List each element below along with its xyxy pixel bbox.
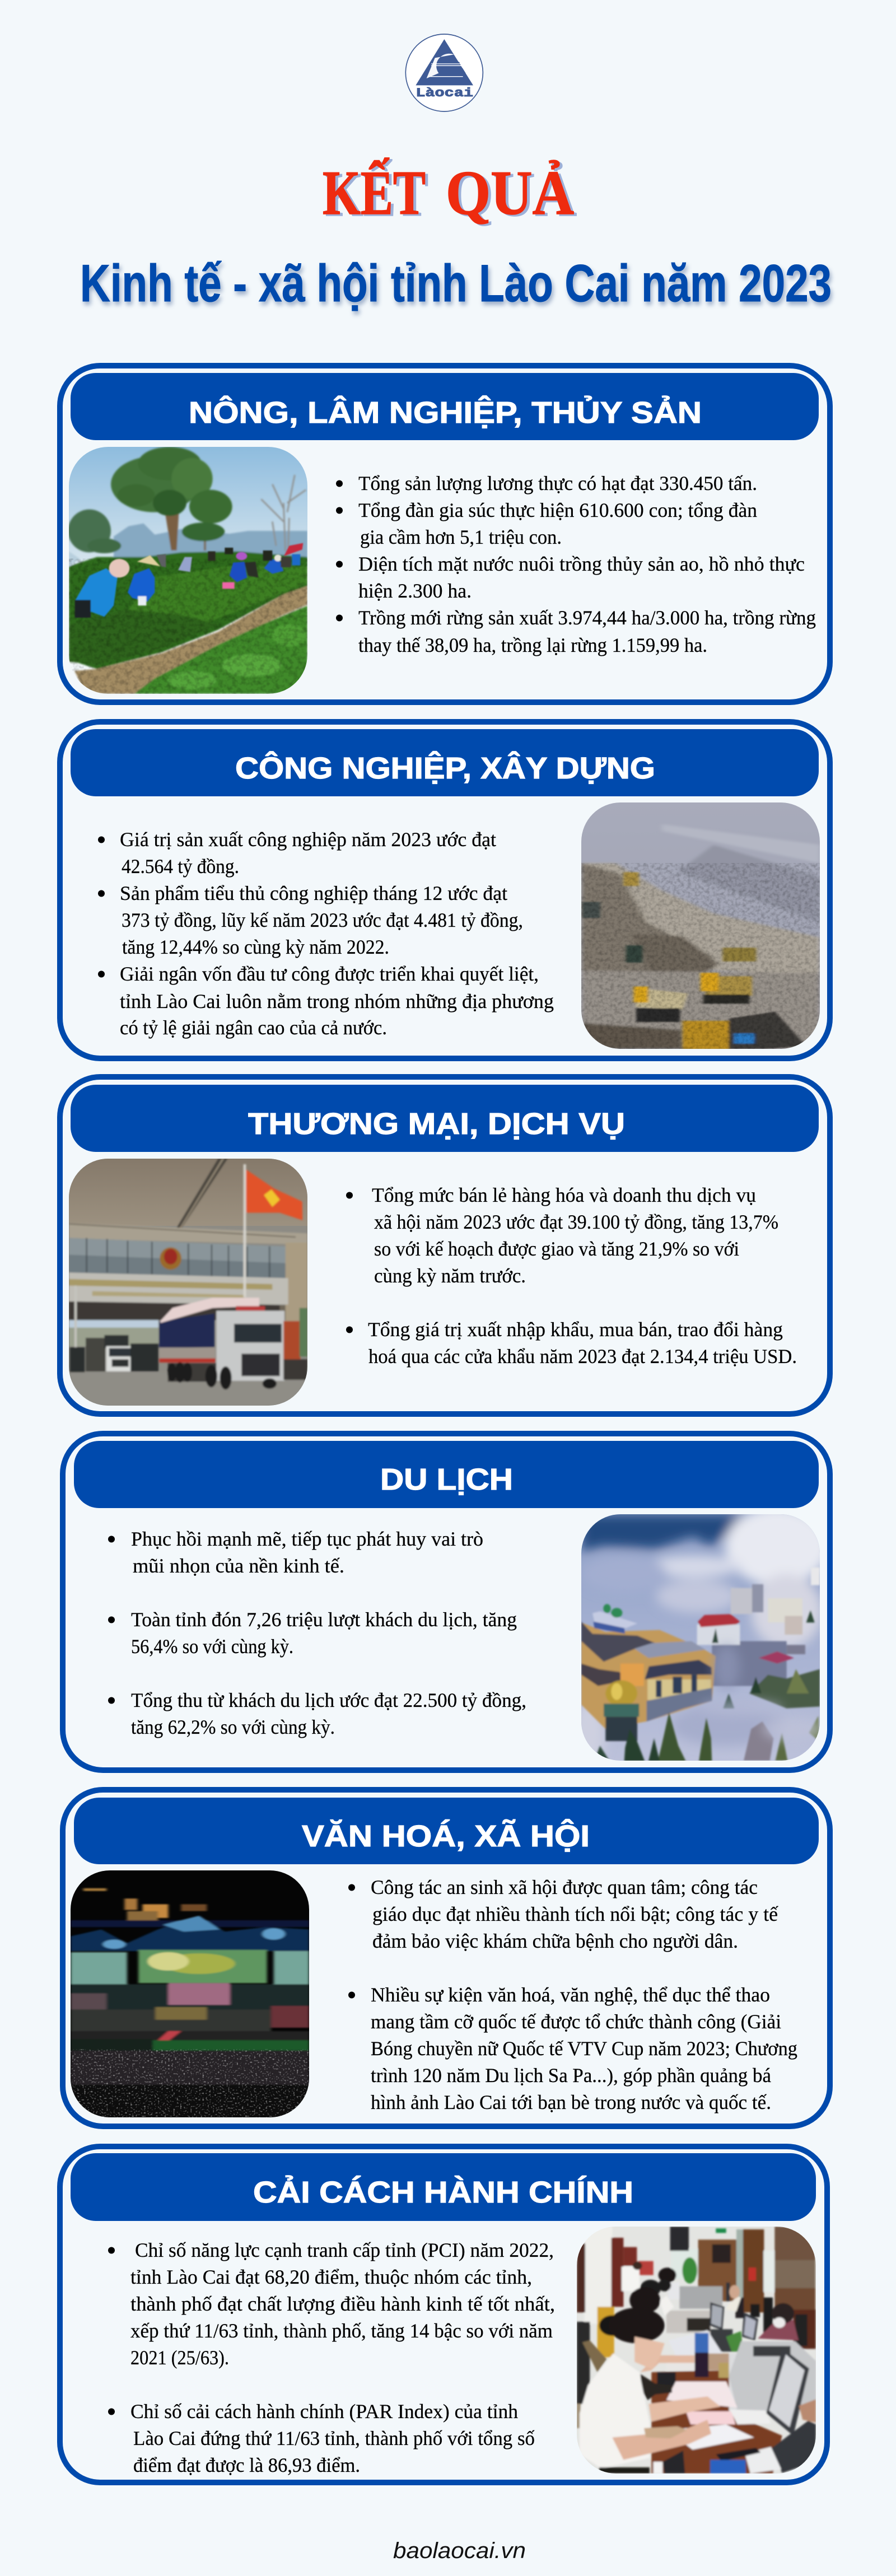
text block: Nhiều sự kiện văn hoá, văn nghệ, thể dục thể thao bbox=[371, 1984, 770, 2006]
text block: gia cầm hơn 5,1 triệu con. bbox=[360, 526, 562, 548]
text block: Diện tích mặt nước nuôi trồng thủy sản ao, hồ nhỏ thực bbox=[358, 553, 805, 575]
text block: Tổng giá trị xuất nhập khẩu, mua bán, trao đổi hàng bbox=[368, 1318, 783, 1341]
text block: so với kế hoạch được giao và tăng 21,9% so với bbox=[374, 1238, 739, 1260]
text block: 56,4% so với cùng kỳ. bbox=[131, 1635, 293, 1658]
text block: cùng kỳ năm trước. bbox=[374, 1264, 526, 1287]
text block: có tỷ lệ giải ngân cao của cả nước. bbox=[120, 1016, 387, 1039]
text block: Chỉ số năng lực cạnh tranh cấp tỉnh (PCI) năm 2022, bbox=[135, 2239, 554, 2261]
text block: 2021 (25/63). bbox=[130, 2346, 229, 2369]
text block bbox=[346, 1184, 797, 1368]
text block: điểm đạt được là 86,93 điểm. bbox=[133, 2454, 360, 2476]
logo: Lao Cai newspaper bbox=[405, 34, 483, 111]
text block: mang tầm cỡ quốc tế được tổ chức thành công (Giải bbox=[371, 2010, 781, 2033]
panel: nông, lâm nghiệp, thủy sản bbox=[60, 366, 830, 702]
heading: cải cách hành chính: CẢI CÁCH HÀNH CHÍNH bbox=[253, 2176, 633, 2209]
title: KẾT QUẢ: QUẢ bbox=[446, 158, 574, 228]
text block: Sản phẩm tiểu thủ công nghiệp tháng 12 ước đạt bbox=[120, 882, 507, 904]
text block: 373 tỷ đồng, lũy kế năm 2023 ước đạt 4.481 tỷ đồng, bbox=[122, 909, 523, 931]
text block: trình 120 năm Du lịch Sa Pa...), góp phần quảng bá bbox=[371, 2064, 771, 2087]
text block: Tổng mức bán lẻ hàng hóa và doanh thu dịch vụ bbox=[372, 1184, 756, 1206]
text block: Lào Cai đứng thứ 11/63 tỉnh, thành phố với tổng số bbox=[133, 2427, 535, 2449]
heading: văn hoá, xã hội: VĂN HOÁ, XÃ HỘI bbox=[302, 1819, 590, 1853]
heading: công nghiệp, xây dựng bbox=[71, 729, 819, 796]
photo: border gate with trucks bbox=[69, 1159, 307, 1406]
text block: tỉnh Lào Cai luôn nằm trong nhóm những địa phương bbox=[120, 990, 554, 1012]
photo: stage performance at night bbox=[68, 1869, 312, 2119]
text block: Công tác an sinh xã hội được quan tâm; công tác bbox=[371, 1876, 758, 1898]
text block bbox=[98, 828, 554, 1039]
photo: open-pit mine bbox=[580, 801, 822, 1051]
text block: hình ảnh Lào Cai tới bạn bè trong nước và quốc tế. bbox=[371, 2091, 771, 2113]
text block: đảm bảo việc khám chữa bệnh cho người dân. bbox=[372, 1930, 738, 1952]
heading: thương mại, dịch vụ bbox=[71, 1085, 819, 1152]
text block: 42.564 tỷ đồng. bbox=[122, 855, 239, 878]
panel: cải cách hành chính bbox=[60, 2146, 827, 2482]
heading: nông, lâm nghiệp, thủy sản: NÔNG, LÂM NGHIỆP, THỦY SẢN bbox=[189, 395, 702, 430]
heading: công nghiệp, xây dựng: CÔNG NGHIỆP, XÂY DỰNG bbox=[235, 751, 655, 785]
text block: Bóng chuyền nữ Quốc tế VTV Cup năm 2023; Chương bbox=[371, 2037, 797, 2060]
text block: tăng 62,2% so với cùng kỳ. bbox=[131, 1716, 335, 1738]
text block: tăng 12,44% so cùng kỳ năm 2022. bbox=[122, 936, 389, 958]
text block: Chỉ số cải cách hành chính (PAR Index) của tỉnh bbox=[130, 2400, 518, 2423]
text block: Toàn tỉnh đón 7,26 triệu lượt khách du lịch, tăng bbox=[131, 1608, 517, 1631]
text block: thành phố đạt chất lượng điều hành kinh tế tốt nhất, bbox=[130, 2293, 555, 2315]
text block: Phục hồi mạnh mẽ, tiếp tục phát huy vai trò bbox=[131, 1528, 483, 1550]
text block bbox=[108, 2239, 555, 2476]
footer: source: baolaocai.vn bbox=[393, 2538, 526, 2563]
logo: Lao Cai newspaper: Làocai bbox=[416, 86, 473, 100]
text block: Giải ngân vốn đầu tư công được triển khai quyết liệt, bbox=[120, 963, 539, 985]
text block: xã hội năm 2023 ước đạt 39.100 tỷ đồng, tăng 13,7% bbox=[374, 1211, 778, 1233]
text block: hoá qua các cửa khẩu năm 2023 đạt 2.134,4 triệu USD. bbox=[368, 1345, 797, 1368]
text block: mũi nhọn của nền kinh tế. bbox=[133, 1555, 344, 1577]
text block: Tổng sản lượng lương thực có hạt đạt 330.450 tấn. bbox=[358, 472, 757, 494]
text block bbox=[348, 1876, 797, 2113]
text block: Tổng đàn gia súc thực hiện 610.600 con; tổng đàn bbox=[358, 499, 757, 521]
panel: văn hoá, xã hội bbox=[63, 1790, 830, 2126]
text block bbox=[336, 472, 816, 656]
text block: xếp thứ 11/63 tỉnh, thành phố, tăng 14 bậc so với năm bbox=[130, 2320, 553, 2342]
text block: tỉnh Lào Cai đạt 68,20 điểm, thuộc nhóm các tỉnh, bbox=[130, 2266, 532, 2288]
text block: Tổng thu từ khách du lịch ước đạt 22.500 tỷ đồng, bbox=[131, 1689, 526, 1711]
heading: nông, lâm nghiệp, thủy sản bbox=[71, 373, 819, 440]
panel: thương mại, dịch vụ bbox=[60, 1077, 830, 1414]
photo: public service office bbox=[577, 2227, 816, 2474]
heading: cải cách hành chính bbox=[71, 2153, 816, 2221]
text block: thay thế 38,09 ha, trồng lại rừng 1.159,99 ha. bbox=[358, 634, 707, 656]
heading: du lịch bbox=[74, 1441, 819, 1508]
heading: thương mại, dịch vụ: THƯƠNG MẠI, DỊCH VỤ bbox=[248, 1107, 625, 1141]
heading: văn hoá, xã hội bbox=[74, 1798, 819, 1864]
panel: du lịch bbox=[63, 1434, 830, 1770]
text block bbox=[108, 1528, 526, 1738]
photo: tea harvest bbox=[68, 447, 307, 694]
heading: du lịch: DU LỊCH bbox=[380, 1463, 513, 1496]
text block: Giá trị sản xuất công nghiệp năm 2023 ước đạt bbox=[120, 828, 496, 851]
panel: công nghiệp, xây dựng bbox=[60, 722, 830, 1058]
photo: misty Sa Pa town bbox=[581, 1514, 820, 1761]
text block: hiện 2.300 ha. bbox=[358, 580, 472, 602]
title: KẾT QUẢ: KẾT bbox=[323, 158, 426, 228]
text block: Trồng mới rừng sản xuất 3.974,44 ha/3.000 ha, trồng rừng bbox=[358, 606, 816, 629]
text block: giáo dục đạt nhiều thành tích nổi bật; công tác y tế bbox=[372, 1903, 778, 1925]
title: KẾT QUẢ bbox=[323, 158, 574, 228]
